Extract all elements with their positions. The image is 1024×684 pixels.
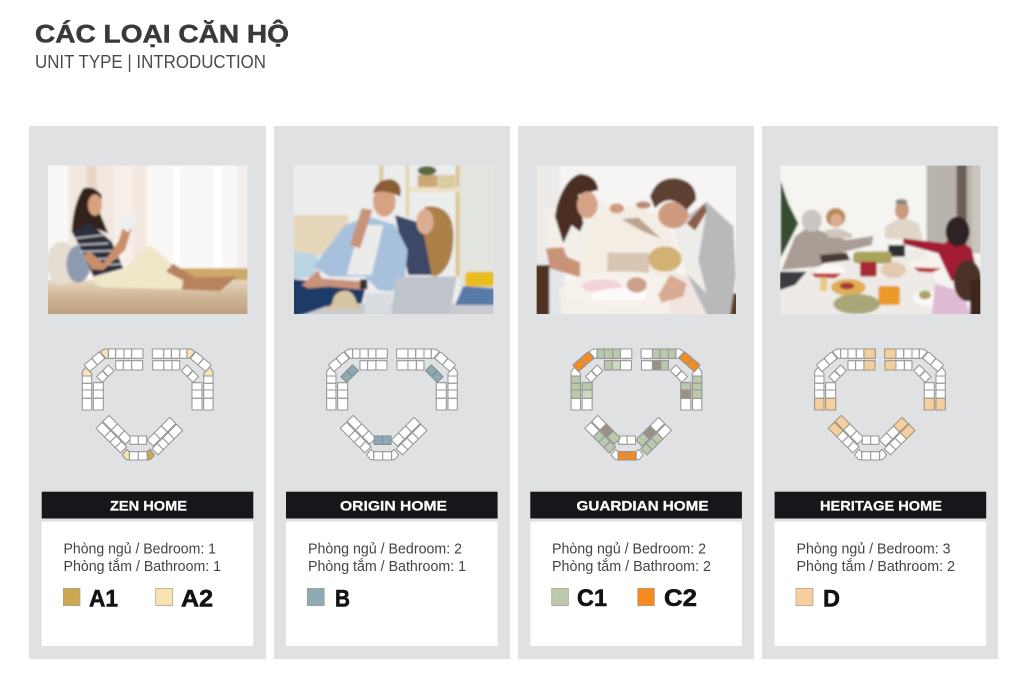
left wing units <box>593 424 622 453</box>
name bar: guardian home <box>530 492 742 518</box>
info card: origin home <box>286 522 498 646</box>
photo: parents with baby in bassinet <box>536 166 736 314</box>
floor plan: B units <box>327 349 457 460</box>
info card: zen home: A1 <box>89 586 118 613</box>
title block <box>35 18 289 72</box>
left side C1 units <box>571 349 620 398</box>
info card: guardian home: Phòng ngủ / Bedroom: 2 <box>552 541 706 557</box>
name bar: origin home: ORIGIN HOME <box>340 498 447 514</box>
info card: guardian home: C1 <box>577 585 607 612</box>
info card: origin home: Phòng tắm / Bathroom: 1 <box>308 558 466 575</box>
name bar: heritage home <box>775 492 986 518</box>
info card: heritage home: Phòng tắm / Bathroom: 2 <box>796 558 955 575</box>
subtitle: UNIT TYPE | INTRODUCTION <box>35 51 266 72</box>
panel: guardian home <box>518 126 754 659</box>
panel: origin home <box>274 126 510 659</box>
floor plan: C1 and C2 units <box>571 349 702 460</box>
name bar: heritage home: HERITAGE HOME <box>820 498 942 514</box>
info card: guardian home: C2 <box>664 585 697 612</box>
photo: woman reading on sofa <box>48 166 248 314</box>
photo: couple with laptop <box>294 166 494 314</box>
info card: zen home: A2 <box>181 586 213 613</box>
floor plan: A1 and A2 units <box>82 349 213 460</box>
info card: guardian home <box>530 522 742 646</box>
info card: origin home: B <box>335 586 350 613</box>
info card: zen home: Phòng tắm / Bathroom: 1 <box>64 558 221 575</box>
photo: family dinner <box>780 166 980 314</box>
panel: heritage home <box>762 126 998 659</box>
panel: zen home <box>29 126 266 659</box>
info card: zen home <box>42 522 253 646</box>
right side C1 units <box>652 349 702 398</box>
C2 units <box>573 352 700 460</box>
info card: heritage home <box>775 522 986 646</box>
name bar: zen home <box>42 492 253 518</box>
right wing units <box>634 426 663 455</box>
name bar: guardian home: GUARDIAN HOME <box>576 498 708 514</box>
info card: guardian home: Phòng tắm / Bathroom: 2 <box>552 558 711 575</box>
info card: heritage home: Phòng ngủ / Bedroom: 3 <box>796 541 950 557</box>
name bar: zen home: ZEN HOME <box>110 498 187 514</box>
title: CÁC LOẠI CĂN HỘ <box>35 18 289 48</box>
info card: heritage home: D <box>823 586 840 613</box>
info card: zen home: Phòng ngủ / Bedroom: 1 <box>64 541 216 557</box>
floor plan: D units <box>815 349 945 460</box>
info card: origin home: Phòng ngủ / Bedroom: 2 <box>308 541 462 557</box>
name bar: origin home <box>286 492 498 518</box>
